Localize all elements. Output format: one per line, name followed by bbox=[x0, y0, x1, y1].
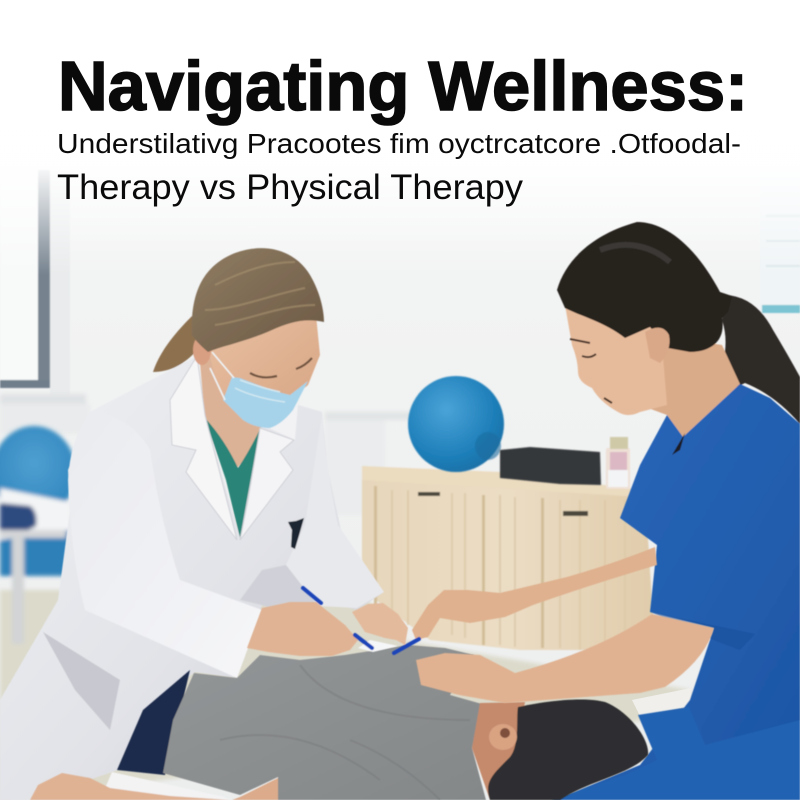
doctor in white coat bbox=[0, 248, 384, 800]
ponytail bbox=[153, 316, 197, 372]
bottle bbox=[606, 437, 630, 489]
wall molding bbox=[0, 394, 425, 515]
neck bbox=[640, 335, 740, 437]
blue pen 2 bbox=[394, 639, 419, 653]
therapist upper forearm bbox=[412, 547, 657, 640]
hands and arms bbox=[247, 547, 714, 703]
face bbox=[565, 305, 667, 415]
white fade behind heading bbox=[0, 0, 800, 275]
ear bbox=[645, 328, 670, 363]
exercise table left bbox=[0, 426, 76, 644]
subtitle line 2: Therapy vs Physical Therapy bbox=[57, 168, 524, 207]
blue exercise ball bbox=[408, 376, 504, 472]
wall poster bbox=[760, 170, 800, 313]
subtitle line 1: Understilativg Pracootes fim oyctrcatcore .Otfoodal- bbox=[57, 128, 741, 159]
ear bbox=[489, 724, 517, 750]
eyes bbox=[250, 358, 312, 377]
navy trousers bbox=[117, 670, 190, 775]
face bbox=[205, 315, 320, 410]
pants bbox=[551, 707, 800, 800]
scrub top bbox=[205, 418, 261, 538]
left sleeve bbox=[68, 412, 262, 678]
bed right bbox=[632, 688, 691, 716]
blue pen 1 bbox=[303, 588, 372, 648]
hair bbox=[557, 222, 732, 352]
sleeve shading bbox=[650, 612, 755, 650]
wood cabinet bbox=[362, 466, 655, 650]
patient lying on table bbox=[30, 645, 648, 800]
window bbox=[0, 170, 70, 395]
ponytail bbox=[714, 295, 800, 424]
floor bbox=[0, 590, 690, 800]
dark curly hair bbox=[488, 699, 648, 800]
patient arm bbox=[232, 778, 278, 800]
eyes and mouth bbox=[570, 339, 612, 403]
doctor supporting hand bbox=[352, 603, 408, 645]
surgical mask bbox=[223, 377, 308, 428]
lapels bbox=[170, 356, 237, 540]
right sleeve bbox=[286, 415, 384, 608]
table bed bbox=[100, 772, 230, 800]
neck bbox=[198, 340, 265, 470]
ear bbox=[193, 335, 211, 365]
coat body bbox=[0, 356, 384, 800]
coat fold shadow bbox=[43, 632, 120, 730]
hair bbox=[192, 248, 324, 352]
hand bottom bbox=[30, 773, 230, 800]
therapist in blue scrubs bbox=[551, 222, 800, 800]
neck bbox=[472, 702, 525, 800]
black box bbox=[500, 447, 601, 485]
neck opening bbox=[672, 433, 685, 455]
scrub top bbox=[555, 384, 800, 800]
therapist lower forearm bbox=[416, 614, 714, 703]
pocket pens bbox=[288, 518, 304, 549]
paper bbox=[358, 640, 398, 652]
sleeve crease shadow bbox=[240, 565, 318, 620]
title: Navigating Wellness: bbox=[58, 47, 748, 125]
grey shirt bbox=[163, 645, 486, 800]
doctor writing hand bbox=[247, 602, 358, 656]
